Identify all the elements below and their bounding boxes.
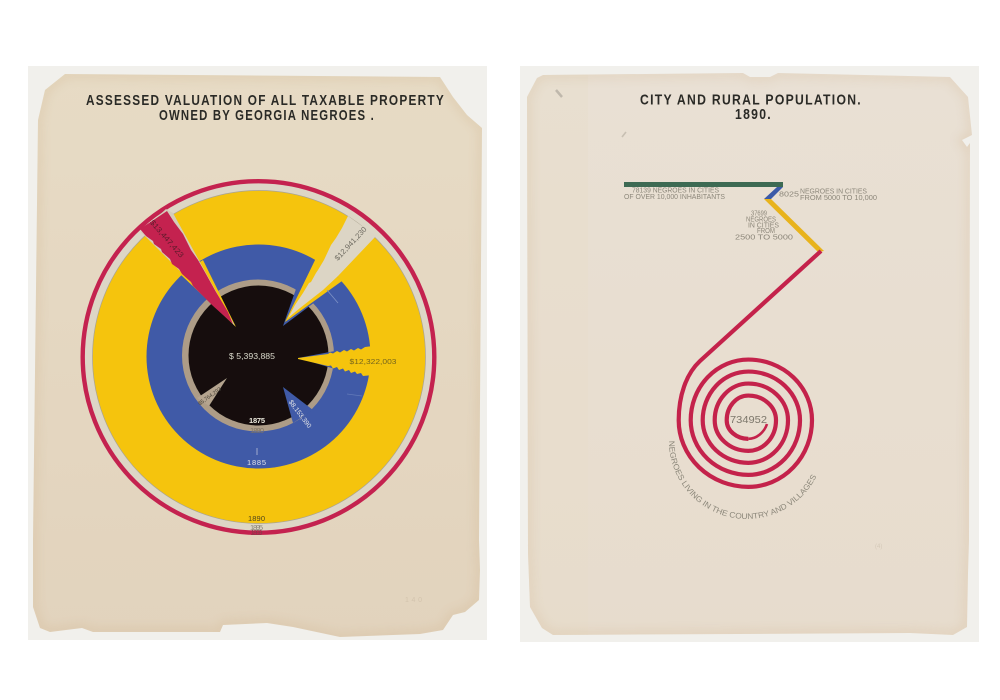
label: negroes living in the country and villages: NEGROES LIVING IN THE COUNTRY AND VILLAGES — [669, 441, 816, 519]
title: city and rural population: CITY AND RURAL POPULATION. — [640, 92, 862, 108]
spiral: country and villages red — [679, 251, 821, 487]
label: 1875 value: $ 5,393,885 — [229, 351, 275, 361]
circle: 1875 black — [188, 286, 328, 426]
wedge: 1899 red: $13,447,423 — [148, 218, 186, 259]
title: assessed valuation: OWNED BY GEORGIA NEGROES . — [159, 107, 375, 124]
title: assessed valuation — [86, 92, 445, 124]
label: 78139 negroes in cities over 10,000: 78139 NEGROES IN CITIES — [632, 186, 719, 195]
ring: 1880 tan — [182, 280, 334, 432]
wedge: 1885 blue: $8,153,390 — [287, 399, 313, 430]
chart: concentric valuation circles — [83, 181, 434, 537]
label: 1885: 1885 — [247, 458, 266, 467]
label: 8025 negroes in cities 5,000 to 10,000: FROM 5000 TO 10,000 — [800, 193, 877, 202]
ring: 1890 yellow — [92, 190, 426, 524]
note: pencil mark: (4) — [875, 544, 882, 550]
wedge: 1885 blue — [283, 387, 313, 430]
label: 734952: 734952 — [730, 415, 767, 426]
label: 37699 negroes in cities 2,500 to 5,000: 2500 TO 5000 — [735, 233, 793, 242]
ring: 1885 blue — [146, 244, 370, 468]
segment: cities 2,500 to 5,000 yellow — [764, 199, 824, 252]
label: 37699 negroes in cities 2,500 to 5,000: IN CITIES — [748, 220, 779, 230]
wedge: 1899 red — [140, 209, 236, 327]
label: 37699 negroes in cities 2,500 to 5,000: NEGROES — [746, 215, 776, 224]
label: 1895: 1895 — [250, 523, 263, 532]
segment: cities 5,000 to 10,000 blue — [764, 187, 783, 199]
label: 8025 negroes in cities 5,000 to 10,000: 8025 — [779, 190, 799, 199]
wedge: 1895 beige: $12,941,230 — [333, 225, 369, 262]
label: 8025 negroes in cities 5,000 to 10,000: NEGROES IN CITIES — [800, 187, 867, 196]
label: 8025 negroes in cities 5,000 to 10,000 — [779, 187, 877, 202]
panel: left plate — [28, 66, 487, 640]
label: 1880: 1880 — [250, 426, 264, 435]
wedge: 1890 yellow — [298, 346, 396, 376]
wedge: 1880 tan — [197, 378, 227, 407]
label: 1885 — [247, 448, 266, 467]
label: 1875: 1875 — [249, 416, 265, 425]
title: assessed valuation: ASSESSED VALUATION OF ALL TAXABLE PROPERTY — [86, 92, 445, 109]
label: 1899: 1899 — [250, 528, 262, 537]
wedge: 1880 tan: $5,764,293 — [197, 386, 223, 407]
label: 78139 negroes in cities over 10,000: OF OVER 10,000 INHABITANTS — [624, 192, 725, 201]
label: 1890: 1890 — [248, 514, 265, 523]
chart: population line — [624, 182, 824, 487]
label: 78139 negroes in cities over 10,000 — [624, 186, 725, 201]
title: city and rural population: 1890. — [735, 106, 772, 123]
label: 37699 negroes in cities 2,500 to 5,000: FROM — [757, 226, 775, 235]
paper sheet: left — [28, 66, 487, 640]
segment: cities over 10,000 green — [624, 182, 783, 187]
note: pencil number: 140 — [405, 597, 422, 604]
wedge: 1890 yellow: $12,322,003 — [350, 357, 396, 366]
wedge: 1895 beige — [283, 216, 376, 326]
panel: right plate — [520, 66, 979, 642]
title: city and rural population — [640, 92, 862, 123]
label: 37699 negroes in cities 2,500 to 5,000: 37699 — [751, 209, 767, 218]
ring: 1899 red outer — [83, 181, 434, 533]
paper sheet: right — [520, 66, 979, 642]
label: 37699 negroes in cities 2,500 to 5,000 — [735, 209, 793, 242]
